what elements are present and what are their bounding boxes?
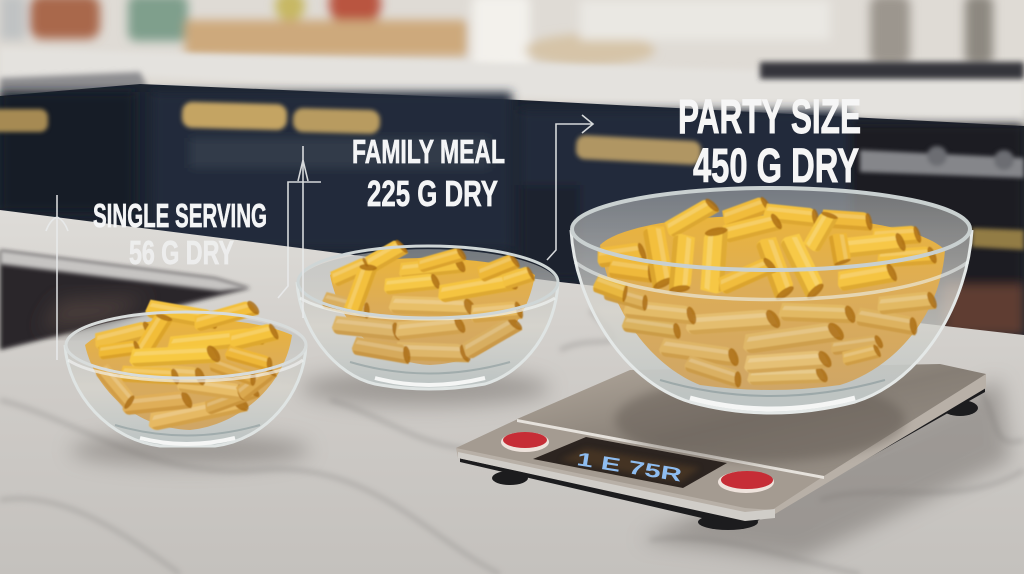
scale feet xyxy=(460,380,985,530)
label: single serving: SINGLE SERVING xyxy=(93,197,267,234)
label: party size: 450 G DRY xyxy=(693,140,859,193)
bowl shadows on the counter xyxy=(70,370,1010,560)
label: family meal: FAMILY MEAL xyxy=(352,133,505,170)
medium bowl: family meal xyxy=(297,236,558,389)
background: back worktop xyxy=(0,48,1024,126)
background: dark navy cabinets xyxy=(0,84,1024,340)
digital display xyxy=(533,437,727,488)
penne small bowl xyxy=(92,297,281,433)
penne filling small bowl xyxy=(85,319,292,430)
penne medium bowl xyxy=(320,236,536,365)
kitchen scale xyxy=(456,364,986,530)
arrow: family meal xyxy=(278,146,321,318)
arrow: single serving xyxy=(46,195,68,360)
bowl highlights xyxy=(297,246,558,389)
induction cooktop xyxy=(0,250,250,350)
label: family meal xyxy=(352,133,505,214)
display readout: 1 E 75R xyxy=(575,449,684,487)
scale body xyxy=(456,374,986,520)
arrow: party size xyxy=(547,115,593,260)
scale top plate xyxy=(517,364,986,476)
bowl highlights xyxy=(571,188,972,413)
large bowl: party size xyxy=(571,188,972,413)
red button left xyxy=(501,432,549,452)
label: party size xyxy=(678,91,861,193)
bowl glass xyxy=(571,188,972,413)
label: single serving xyxy=(93,197,267,271)
penne large bowl xyxy=(591,193,939,390)
scale front panel xyxy=(456,418,824,510)
bowl glass xyxy=(297,249,558,389)
marble counter xyxy=(0,210,1024,574)
penne filling large bowl xyxy=(600,216,945,390)
background: kitchen wall and shelf items xyxy=(0,0,1024,110)
background: gold and steel cabinet handles xyxy=(0,102,1024,250)
label: single serving: 56 G DRY xyxy=(129,234,234,271)
red button right xyxy=(718,471,774,493)
bowl glass xyxy=(65,315,306,446)
bowl reflection on plate xyxy=(615,378,905,462)
bowl highlights xyxy=(65,312,306,446)
penne filling medium bowl xyxy=(330,258,535,365)
label: party size: PARTY SIZE xyxy=(678,91,861,144)
label: family meal: 225 G DRY xyxy=(367,173,498,214)
small bowl: single serving xyxy=(65,297,306,446)
